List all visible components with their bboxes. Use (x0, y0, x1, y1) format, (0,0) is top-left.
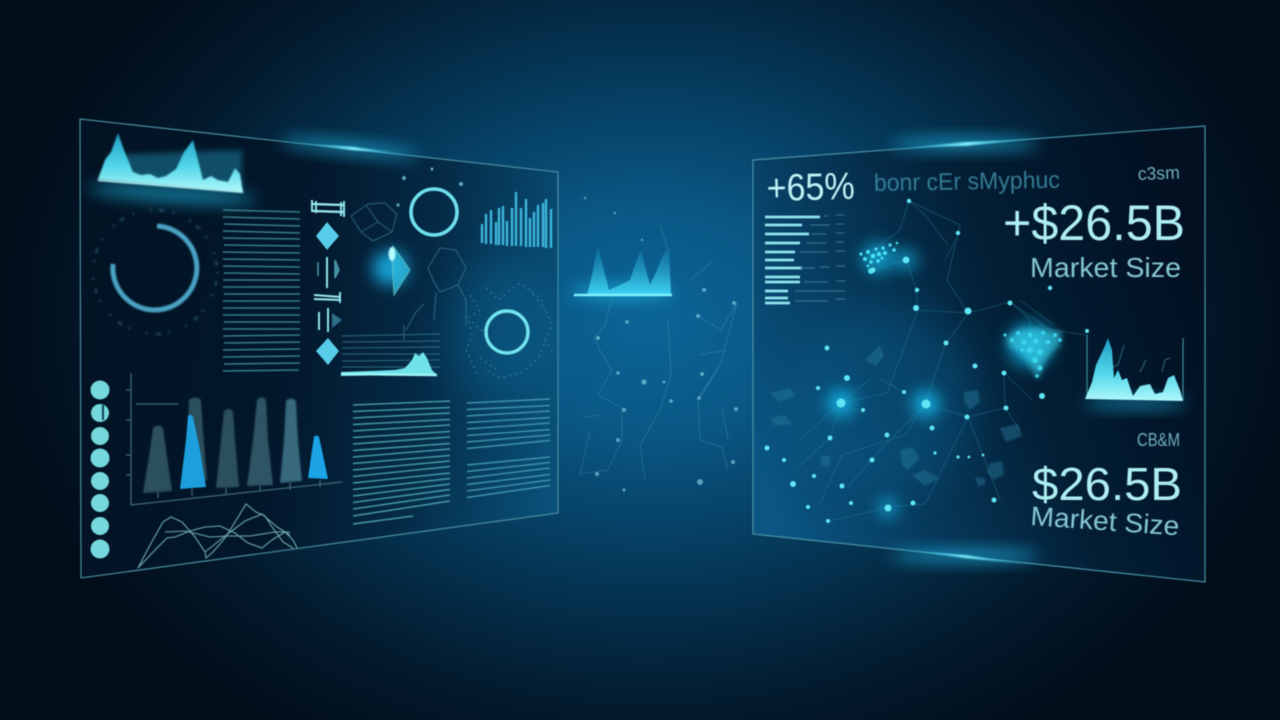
center network (580, 197, 738, 492)
stat: market size bottom: Market Size (1030, 501, 1180, 541)
map blobs (770, 345, 1022, 486)
glow on top edge of right panel (890, 138, 1040, 150)
text lines block (223, 210, 300, 371)
data cluster right (1003, 328, 1062, 380)
line chart (138, 504, 297, 568)
icon column (312, 200, 344, 365)
wireframe polyhedra (351, 203, 466, 340)
label: top corner code: c3sm (1137, 163, 1180, 184)
stat: market size bottom: $26.5B (1032, 458, 1182, 510)
data cluster left (859, 242, 898, 274)
area chart top left (87, 133, 257, 207)
bar chart top right (482, 192, 551, 248)
glowing crystal (373, 246, 410, 295)
stat: growth percent: +65% (766, 166, 855, 210)
stat: market size top: +$26.5B (1003, 195, 1185, 251)
connection lines (795, 201, 1088, 521)
haze behind network ring (450, 260, 560, 400)
text lines block right (467, 399, 550, 498)
label: lower corner code: CB&M (1137, 430, 1180, 450)
map haze (785, 305, 975, 495)
network map (764, 199, 1089, 523)
network nodes (764, 199, 1089, 523)
gauge ring (93, 210, 217, 334)
glow on top edge of left panel (280, 135, 420, 161)
center area chart (570, 245, 674, 300)
panel: right market dashboard (753, 126, 1205, 582)
ring with network (466, 283, 552, 378)
area chart right (1083, 335, 1187, 408)
text lines block lower (353, 401, 450, 524)
stat: market size top (1003, 195, 1185, 283)
cone bar chart (126, 373, 342, 505)
status dots (90, 380, 110, 558)
heading: distorted label: bonr cEr sMyphuc (874, 167, 1060, 197)
horizontal bar list (765, 215, 845, 303)
panel: left dashboard (80, 119, 560, 578)
ring top (411, 189, 457, 235)
stat: market size bottom (1030, 458, 1182, 541)
stat: market size top: Market Size (1030, 252, 1181, 283)
glow on bottom edge of right panel (890, 550, 1040, 565)
small wave chart (341, 334, 440, 376)
network glows (828, 243, 1052, 517)
ring top satellites (396, 168, 463, 207)
